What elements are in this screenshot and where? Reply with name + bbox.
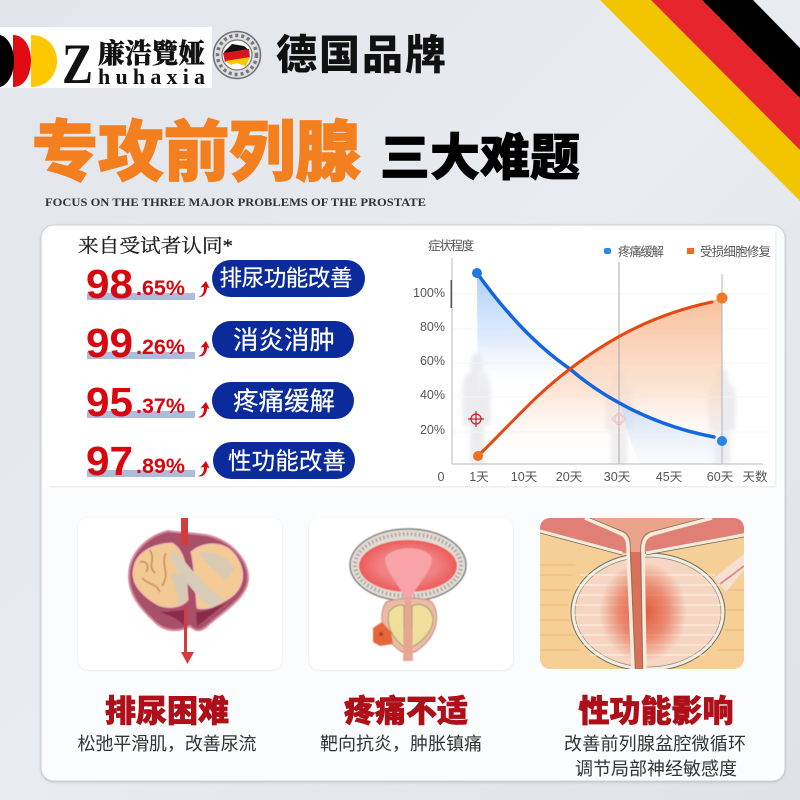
title orange: 专攻前列腺	[32, 115, 361, 189]
y axis labels: 100%	[413, 286, 445, 300]
prostate gland	[382, 598, 437, 652]
stat row 1: 98	[86, 261, 133, 307]
flow arrow	[181, 518, 194, 664]
caption: sexual function: 改善前列腺盆腔微循环	[564, 734, 746, 754]
axes	[452, 258, 763, 464]
prostate cross-section	[129, 531, 248, 630]
urethra	[403, 598, 413, 661]
urethra channel	[630, 552, 644, 669]
stat row 1: .65%	[136, 277, 185, 300]
stat row 1	[86, 260, 365, 307]
caption: urination	[78, 694, 256, 754]
target marker day 1	[468, 411, 484, 427]
y axis labels	[413, 286, 445, 437]
German flag diagonal stripes	[600, 0, 800, 201]
chart gridlines	[453, 294, 768, 432]
chart silhouettes	[462, 352, 736, 464]
stat row 2	[86, 320, 354, 366]
blue curve	[472, 268, 727, 446]
legend	[604, 244, 771, 259]
stat row 2: .26%	[136, 336, 185, 359]
prostate capsule	[573, 555, 723, 669]
stat row 3: 95	[86, 379, 133, 425]
line chart	[413, 238, 771, 484]
stat row 2: 99	[86, 320, 133, 366]
muscle band	[540, 518, 744, 553]
stat row 4	[86, 438, 355, 484]
x axis labels: 0	[438, 470, 445, 484]
caption: sexual function: 性功能影响	[578, 694, 734, 729]
x axis labels: 60天	[707, 470, 734, 484]
area under blue curve	[477, 273, 570, 456]
y axis title: 症状程度	[428, 238, 474, 253]
area under orange curve	[478, 298, 722, 464]
stat row 3: .37%	[136, 395, 185, 418]
caption: pain: 靶向抗炎，肿胀镇痛	[320, 734, 482, 754]
brand logo: Z	[62, 33, 93, 96]
stats heading: 来自受试者认同*	[78, 235, 233, 257]
x axis labels: 1天	[469, 470, 489, 484]
caption: pain	[320, 694, 482, 754]
caption: sexual function: 调节局部神经敏感度	[575, 759, 737, 779]
stat row 4: 97	[86, 438, 133, 484]
stat row 4: .89%	[136, 455, 185, 478]
inflammation	[599, 562, 687, 662]
y axis labels: 40%	[420, 388, 445, 402]
quality badge	[214, 32, 260, 78]
tissue stripes	[574, 575, 722, 655]
stat row 3	[86, 379, 354, 425]
main white panel	[41, 225, 785, 781]
blue fill near end	[619, 401, 722, 464]
nodule	[373, 622, 393, 646]
caption: sexual function	[564, 694, 746, 779]
y axis labels: 60%	[420, 354, 445, 368]
brand logo	[0, 27, 212, 96]
caption: pain: 疼痛不适	[344, 694, 468, 729]
stat row 4: 性功能改善	[228, 448, 346, 474]
results panel	[44, 228, 776, 488]
x axis labels: 30天	[604, 470, 631, 484]
title black: 三大难题	[380, 130, 580, 186]
bladder inner	[359, 540, 457, 592]
orange curve	[473, 292, 728, 461]
stat row 3: 疼痛缓解	[233, 388, 335, 416]
x axis labels	[438, 469, 768, 484]
legend: 疼痛缓解	[618, 244, 664, 259]
x axis labels: 天数	[742, 469, 768, 484]
y axis labels: 20%	[420, 423, 445, 437]
bladder wall	[350, 529, 466, 601]
x axis labels: 20天	[556, 470, 583, 484]
stat row 1: 排尿功能改善	[220, 266, 352, 291]
y axis labels: 80%	[420, 320, 445, 334]
brand heading: 德国品牌	[276, 32, 446, 78]
nerve bundle	[714, 554, 744, 592]
card: pain illustration	[309, 518, 513, 670]
x axis labels: 10天	[511, 470, 538, 484]
x axis labels: 45天	[656, 470, 683, 484]
upper band edges	[540, 516, 744, 669]
caption: urination: 排尿困难	[105, 694, 229, 729]
fat texture	[540, 565, 744, 650]
brand logo: 廉浩覽娅	[98, 38, 205, 69]
caption: urination: 松弛平滑肌，改善尿流	[78, 734, 256, 754]
card: urination illustration	[78, 518, 282, 670]
target marker day 30	[612, 412, 626, 426]
English subtitle: FOCUS ON THE THREE MAJOR PROBLEMS OF THE PROSTATE	[45, 195, 426, 209]
stat row 2: 消炎消肿	[233, 327, 335, 355]
brand logo: huhaxia	[98, 64, 205, 89]
legend: 受损细胞修复	[700, 244, 771, 259]
dark axis mark	[450, 280, 452, 308]
card: sexual function illustration	[540, 516, 744, 671]
